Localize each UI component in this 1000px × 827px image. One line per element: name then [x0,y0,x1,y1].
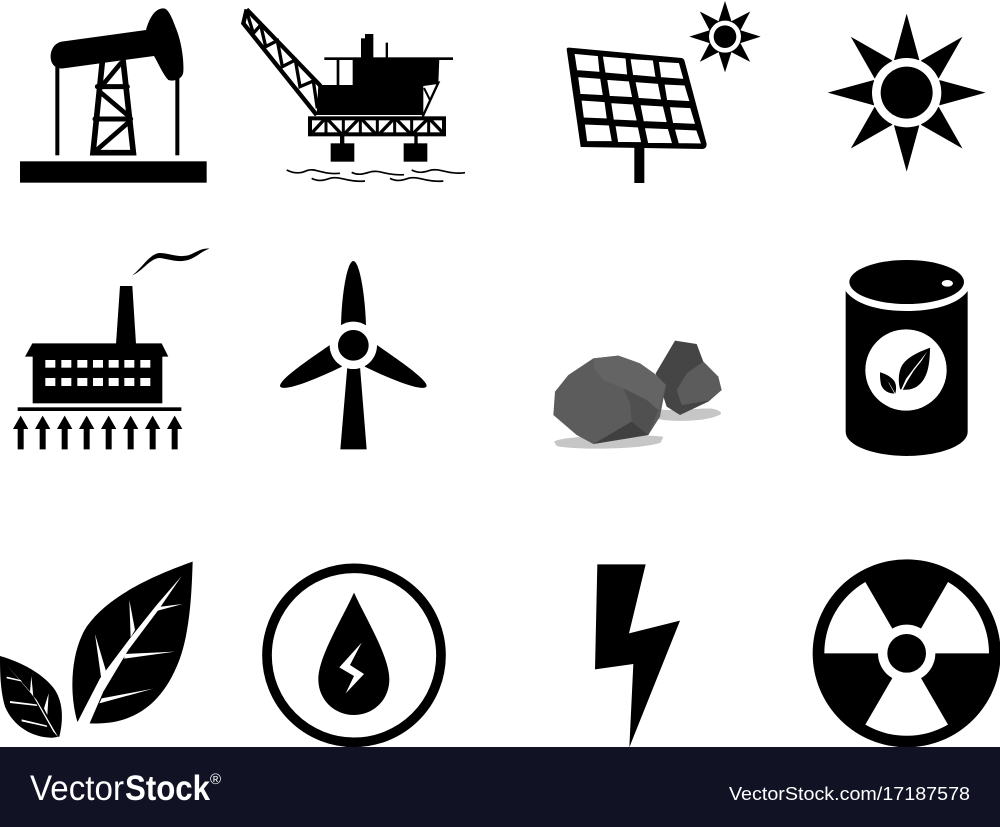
icon: offshore oil rig [243,9,465,181]
icon: energy drop in circle [267,568,441,742]
icon: oil pump jack [20,8,207,183]
footer banner: VectorStock.com/17187578 [729,783,970,804]
icon: solar panel with sun [567,1,761,183]
footer banner: ® [210,771,221,788]
icon: geothermal factory [13,249,209,449]
icon: lightning bolt [595,564,680,747]
icon: radiation symbol [813,559,1000,747]
icon: coal lumps [553,341,722,449]
footer banner: Vector [30,769,124,808]
icon: large sun [828,14,986,172]
footer banner [0,747,1000,827]
icon: two leaves [0,562,193,738]
footer banner: Stock [125,769,210,808]
icon: wind turbine [280,261,427,449]
icon: biofuel barrel [846,260,968,456]
